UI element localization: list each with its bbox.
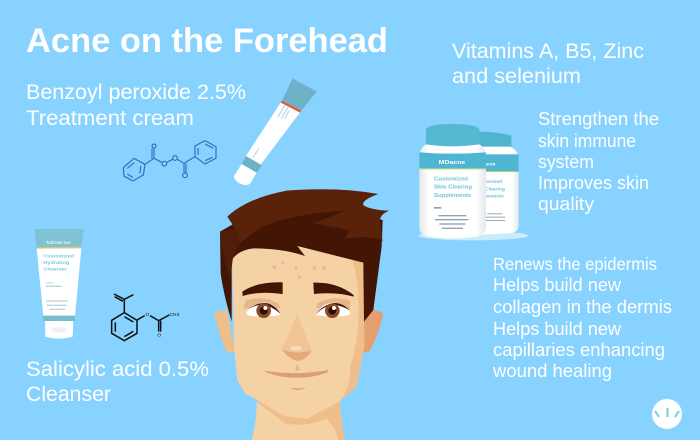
text: benzoyl peroxide: Treatment cream [26,107,194,130]
text: benzoyl peroxide [26,81,246,130]
text: supplement benefits: skin immune [538,131,636,151]
nose [282,314,312,361]
icon: salicylic acid molecule: O [145,312,149,318]
text: supplement benefits: Improves skin [538,173,649,193]
icon: hydrating cleanser tube: MDacne [46,240,71,246]
icon: hydrating cleanser tube [34,229,84,339]
mouth [263,368,328,378]
text: vitamin benefits: wound healing [492,361,612,381]
text: vitamin benefits: collagen in the dermis [493,297,672,317]
text: benzoyl peroxide: Benzoyl peroxide 2.5% [26,81,246,104]
text: salicylic acid: Salicylic acid 0.5% [26,358,209,381]
right eye [316,298,350,318]
text: vitamin benefits: capillaries enhancing [493,340,665,360]
text: salicylic acid: Cleanser [26,383,111,406]
front bottle [419,124,486,238]
title: Acne on the Forehead [26,22,388,60]
front bottle: Supplements [434,193,471,199]
text: salicylic acid [26,358,209,406]
bottle shadow [418,231,528,240]
text: vitamin benefits: Helps build new [493,319,622,339]
icon: hydrating cleanser tube: Customized [43,253,74,258]
icon: salicylic acid molecule: O [157,333,161,339]
icon: benzoyl peroxide molecule [123,141,216,181]
back bottle: lements [485,194,504,200]
text: supplement benefits: system [538,152,594,172]
eyebrows [242,282,283,296]
text: vitamins heading [452,40,644,88]
neck [252,400,345,440]
back bottle: Clearing [485,186,505,192]
icon: salicylic acid molecule: CH3 [169,312,180,318]
face shadow [339,258,364,402]
front bottle: Customized [434,176,468,182]
text: supplement benefits: quality [538,194,594,214]
icon: treatment cream tube [234,78,317,185]
icon: hydrating cleanser tube: Hydrating [43,260,70,265]
ears [214,309,235,353]
illustration: face with acne [214,189,389,440]
icon: salicylic acid molecule [112,294,180,341]
icon: supplement bottles [418,124,528,240]
back bottle: acne [484,162,496,168]
acne spots [273,261,326,279]
front bottle: Skin Clearing [434,184,472,190]
text: supplement benefits [538,109,659,214]
text: vitamin benefits: Renews the epidermis [493,254,657,274]
head [232,237,364,419]
front bottle: MDacne [439,160,465,166]
hair [220,189,389,322]
text: supplement benefits: Strengthen the [538,109,659,129]
text: vitamin benefits [492,254,672,381]
text: vitamins heading: Vitamins A, B5, Zinc [452,40,644,63]
text: vitamins heading: and selenium [452,65,581,88]
icon: MDacne logo badge [652,399,682,429]
left eye [243,298,281,318]
back bottle: omized [485,179,502,185]
icon: hydrating cleanser tube: Cleanser [43,267,67,272]
text: vitamin benefits: Helps build new [493,275,622,295]
back bottle [473,132,519,235]
